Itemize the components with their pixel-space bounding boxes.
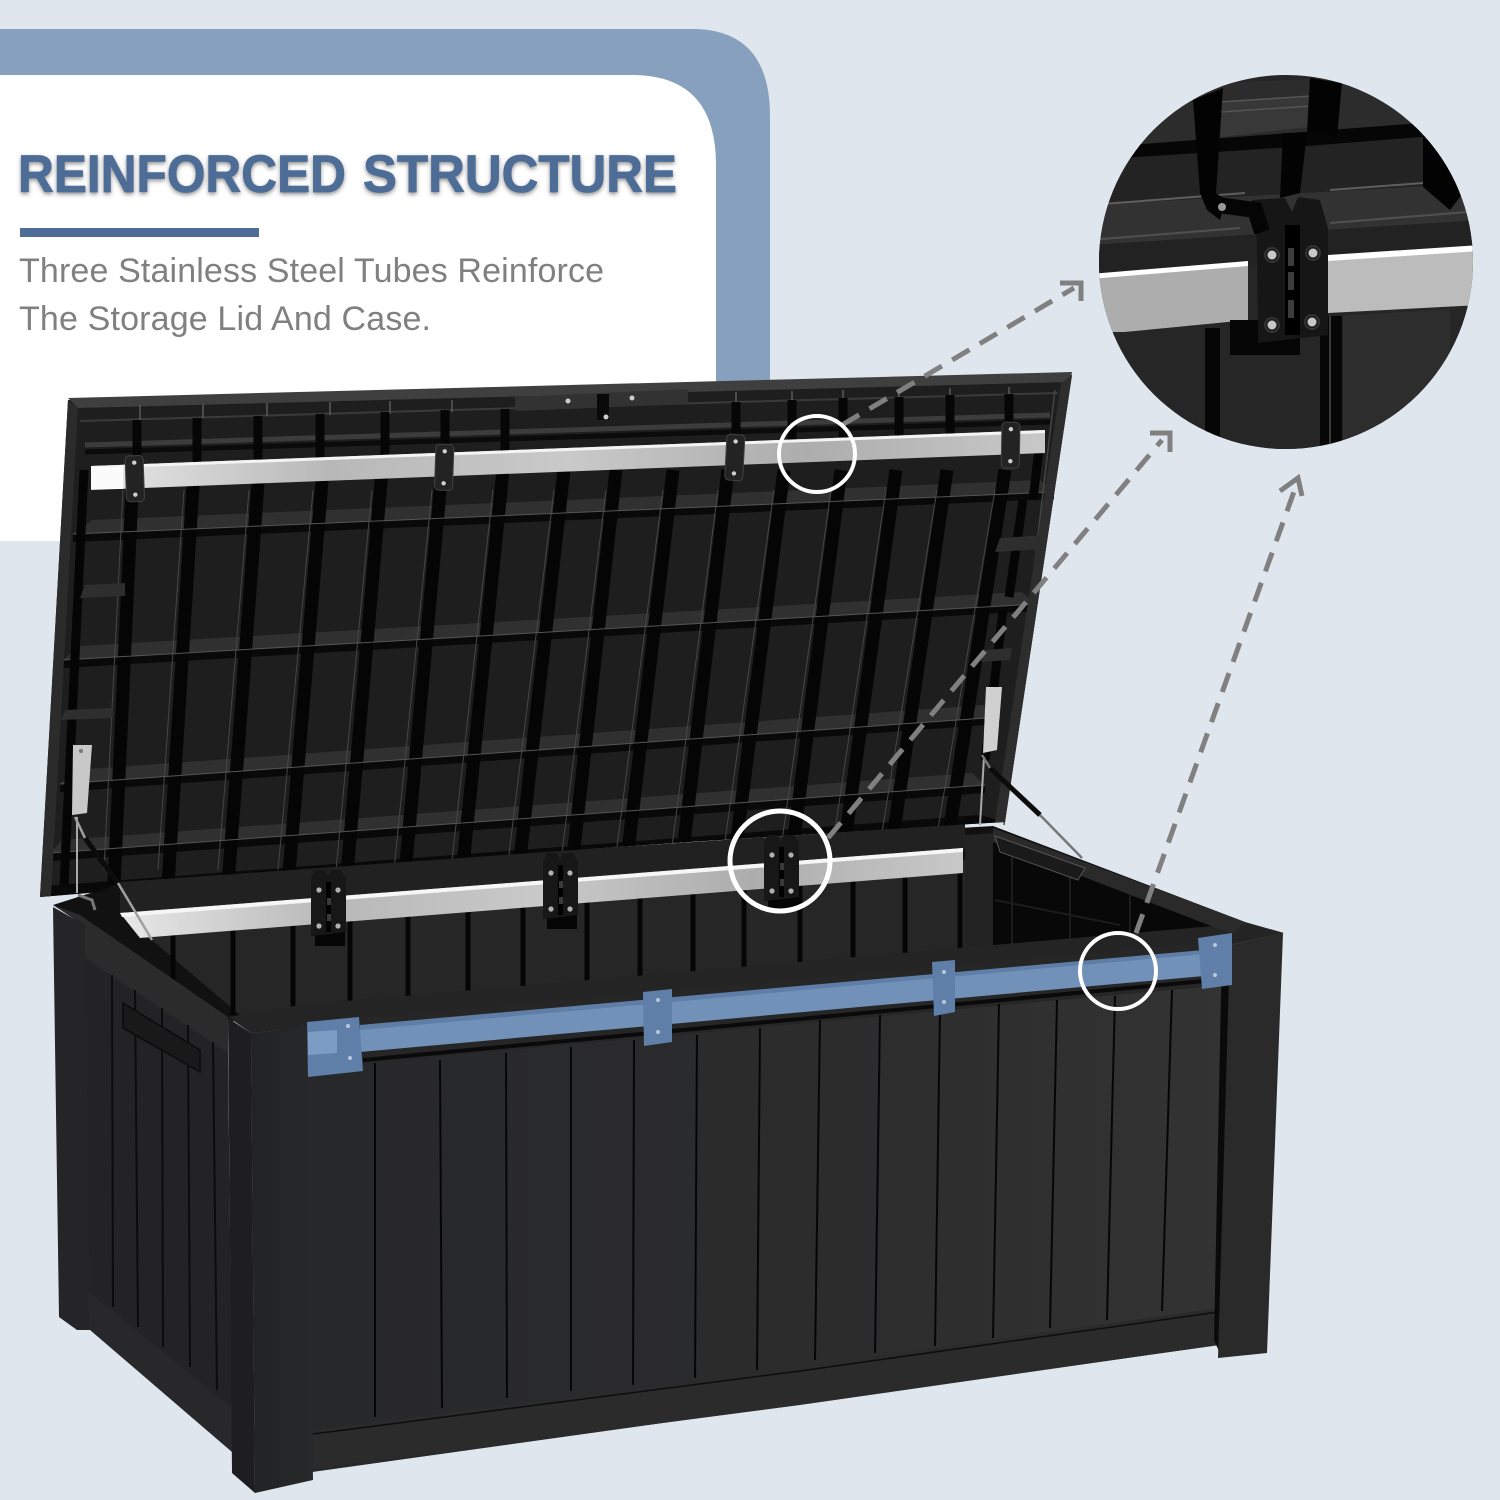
hinge 2 bbox=[543, 853, 578, 929]
tube bracket 4 bbox=[1001, 422, 1020, 468]
blue highlighted tube bbox=[307, 933, 1232, 1077]
side top rim bbox=[53, 905, 228, 1053]
right interior wall bbox=[993, 840, 1232, 958]
magnified steel tube left bbox=[1100, 266, 1248, 332]
right post shadow bbox=[1214, 945, 1232, 1358]
title: REINFORCED bbox=[18, 145, 346, 204]
magnified hinge detail bbox=[1099, 75, 1473, 449]
hinge body bbox=[1218, 197, 1328, 343]
post side face bbox=[228, 1018, 255, 1493]
lid shelves bbox=[50, 480, 1054, 853]
arrow: blue tube to magnifier bbox=[1136, 478, 1302, 933]
right gas strut bbox=[980, 687, 1085, 880]
box right rim bbox=[993, 828, 1245, 934]
storage box interior bbox=[53, 824, 1245, 1040]
tube bracket 2 bbox=[434, 444, 454, 491]
side planks bbox=[112, 975, 217, 1390]
highlight circle: hinge bbox=[730, 811, 830, 911]
white text panel bbox=[0, 75, 716, 541]
shelf shadows bbox=[40, 492, 1054, 897]
hinge 3 bbox=[764, 835, 799, 911]
magnified steel tube right bbox=[1328, 247, 1480, 313]
ridged bands bbox=[1090, 135, 1480, 275]
lid underside bbox=[40, 372, 1072, 897]
interior post bbox=[965, 833, 995, 958]
lid right edge bbox=[995, 375, 1072, 822]
blue frame panel bbox=[0, 29, 770, 385]
top cells bbox=[1130, 78, 1425, 159]
blue bracket 4 bbox=[1198, 933, 1232, 989]
lid left cells bbox=[60, 470, 125, 885]
left back post bbox=[53, 907, 90, 1330]
lower panels bbox=[1113, 308, 1468, 449]
arrow: lid tube to magnifier bbox=[842, 283, 1081, 425]
hinge 1 bbox=[311, 870, 346, 946]
tube bracket 1 bbox=[125, 455, 145, 502]
description text: Three Stainless Steel Tubes Reinforce bbox=[19, 252, 604, 290]
front top rim bbox=[300, 941, 1225, 1068]
tube highlight left bbox=[1090, 261, 1248, 279]
shelf edge lines bbox=[50, 492, 1054, 853]
title: STRUCTURE bbox=[363, 145, 677, 204]
lid right cells bbox=[981, 390, 1055, 825]
dark ribs bbox=[1193, 78, 1463, 220]
side panel bbox=[85, 955, 232, 1412]
front face bbox=[251, 945, 1230, 1480]
title bbox=[18, 145, 677, 204]
lid upper ribs bbox=[80, 387, 1058, 470]
description text bbox=[19, 252, 604, 338]
blue bracket left bbox=[307, 1017, 363, 1077]
rib highlights bbox=[104, 490, 995, 870]
tube bracket 3 bbox=[725, 434, 745, 481]
tube highlight right bbox=[1328, 245, 1480, 261]
tube shadow line bbox=[363, 980, 1215, 1060]
side handle bbox=[123, 1003, 200, 1072]
front top surface bbox=[228, 922, 1284, 1033]
blue bracket 2 bbox=[643, 989, 672, 1046]
highlight circle: lid tube bbox=[779, 416, 855, 492]
upper steel tube bbox=[91, 422, 1045, 502]
front bottom rim bbox=[313, 1308, 1218, 1469]
lower steel tube bbox=[120, 835, 963, 946]
back wall planks bbox=[140, 860, 965, 1035]
lid lock plate bbox=[515, 389, 688, 420]
box front bbox=[228, 922, 1284, 1493]
front planks bbox=[375, 990, 1172, 1417]
blue bracket 3 bbox=[932, 960, 955, 1016]
description text: The Storage Lid And Case. bbox=[19, 300, 431, 338]
box left side bbox=[53, 905, 232, 1452]
left gas strut bbox=[72, 745, 152, 940]
rail under lid bbox=[120, 824, 965, 913]
right front post bbox=[1218, 933, 1283, 1358]
hinge shadow bbox=[1230, 320, 1300, 355]
lid vertical ribs bbox=[104, 470, 1005, 885]
title underline bbox=[20, 228, 259, 237]
lid left edge bbox=[40, 400, 78, 897]
left front post bbox=[251, 1028, 313, 1493]
side bottom rim bbox=[87, 1290, 232, 1452]
lid top rim bbox=[68, 372, 1072, 408]
highlight circle: blue tube bbox=[1080, 933, 1156, 1009]
arrow: hinge to magnifier bbox=[828, 433, 1170, 838]
